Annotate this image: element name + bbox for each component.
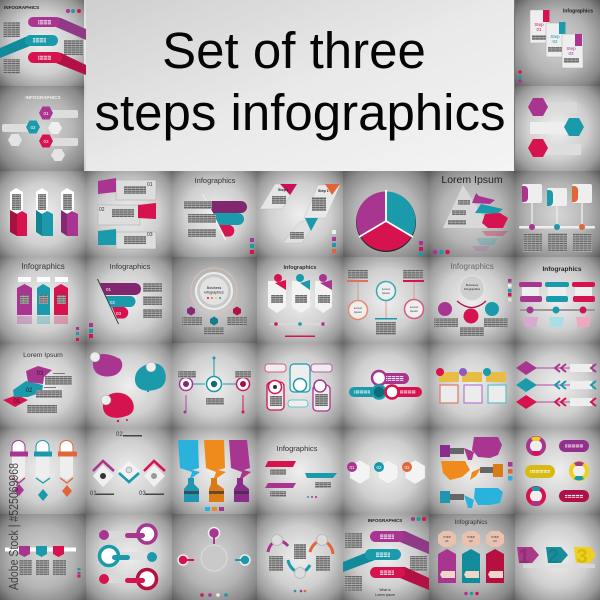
tile: diamond chevrons: 02 <box>116 432 123 438</box>
tile: stacked staircase: 01 <box>14 399 21 405</box>
tile: business infographics cluster: Infographics <box>464 287 481 291</box>
tile: step cards top-right: 02 <box>552 39 558 44</box>
tile: stacked staircase <box>3 352 72 413</box>
tile: step cards top-right: Step <box>534 22 544 27</box>
tile: peach hexes with tags: 03 <box>493 539 497 543</box>
tile: step cards top-right: Step <box>550 34 560 39</box>
tile: ribbon infographic bottom <box>343 517 429 597</box>
tile: peach hexes with tags: Infographics <box>455 520 487 526</box>
tile: flags with text panels <box>98 178 156 249</box>
tile: ribbon infographic bottom: What is <box>379 588 391 592</box>
watermark: stock reference: Adobe Stock | #525069968 <box>7 463 21 590</box>
tile: stacked staircase: Lorem Ipsum <box>23 352 63 359</box>
tile: business infographics cluster: Business <box>466 283 479 287</box>
tile: timeline with banners: Infographics <box>542 266 582 273</box>
tile: step cards top-right: Step <box>566 46 576 51</box>
tile: business infographics circle: Business <box>207 286 221 290</box>
tile: white hexagons <box>347 460 425 484</box>
tile: white hexagons: 03 <box>404 465 410 470</box>
tile: slanted step cards <box>260 184 340 253</box>
tile: triangle pyramid <box>433 174 508 254</box>
tile: slanted step cards: Step 1 <box>278 188 289 192</box>
tile: funnel with right text: 02 <box>110 300 116 305</box>
tile: yellow header frames <box>436 368 506 403</box>
tile: 3D numbered arrows <box>517 546 596 568</box>
tile: peach hexes with tags: 02 <box>469 539 473 543</box>
tile: pie chart <box>356 190 423 256</box>
tile: peach hexes with tags: 01 <box>445 539 449 543</box>
tile: diamond chevrons <box>90 432 165 497</box>
tile: hexagon steps: 02 <box>30 125 36 130</box>
tile: triangle pyramid: Lorem Ipsum <box>441 174 503 186</box>
title panel: Set of three <box>162 22 426 79</box>
tile: 3D numbered arrows: 3 <box>576 546 588 568</box>
tile: diamonds and chevrons <box>516 361 596 409</box>
tile: hexagon steps: INFOGRAPHICS <box>25 95 61 100</box>
tile: rounded frame nodes <box>265 364 332 411</box>
tile: paint bottles <box>178 440 251 511</box>
tile: arch tags <box>10 441 77 501</box>
tile: ringed lorem ipsum nodes: Ipsum <box>382 291 391 295</box>
tile: business infographics cluster <box>434 262 512 336</box>
tile: business infographics cluster: Infographics <box>450 262 494 271</box>
tile: stacked staircase: 03 <box>37 371 44 377</box>
tile: overlapping pills <box>349 371 422 398</box>
tile: hexagon steps: 03 <box>43 139 49 144</box>
tile: ringed lorem ipsum nodes: Lorem <box>354 306 363 310</box>
tile: step cards top-right: 03 <box>568 51 574 56</box>
tile: peach hexes with tags: STEP <box>443 535 451 539</box>
tile: pinned step tags: Infographics <box>283 265 317 271</box>
tile: white hexagons: 01 <box>349 465 355 470</box>
tile: funnel with right text: 01 <box>106 287 112 292</box>
tile: funnel with right text: 03 <box>116 311 122 316</box>
title panel <box>84 0 514 171</box>
tile: funnel with right text: Infographics <box>110 262 151 271</box>
tile: timeline with cards <box>519 184 595 252</box>
tile: step cards top-right: Infographics <box>563 8 593 14</box>
tile: timeline with banners <box>519 266 595 327</box>
tile: three pastel tags <box>17 262 79 341</box>
tile: ringed lorem ipsum nodes: Lorem <box>410 305 419 309</box>
tile: central circle with pins <box>178 528 250 597</box>
tile: 3D numbered arrows: 1 <box>518 546 530 568</box>
tile: slanted banners <box>265 444 337 498</box>
tile: paint blobs <box>90 352 166 422</box>
tile: ringed lorem ipsum nodes: Lorem <box>382 287 391 291</box>
tile: business infographics circle: infographics <box>204 290 224 294</box>
tile: three pastel tags: Infographics <box>21 262 65 271</box>
tile: ringed lorem ipsum nodes <box>347 270 424 335</box>
tile: white hexagons: 02 <box>376 465 382 470</box>
tile: step cards top-right: 01 <box>536 27 542 32</box>
tile: step cards top-right <box>518 8 593 83</box>
tile: ringed lorem ipsum nodes: Ipsum <box>410 309 419 313</box>
tile: ringed lorem ipsum nodes: Ipsum <box>354 310 363 314</box>
tile: 3D numbered arrows: 2 <box>547 546 559 568</box>
tile: 3D boxes with white tags <box>10 188 78 236</box>
tile: slanted banners: Infographics <box>277 444 318 453</box>
tile: ribbon infographic top-left <box>0 5 86 75</box>
tile: connected rings <box>178 356 251 414</box>
tile: funnel with side labels <box>184 176 254 254</box>
tile: stacked staircase: 02 <box>26 388 33 394</box>
tile: flags with text panels: 03 <box>147 232 153 238</box>
tile: peach hexes with tags: STEP <box>467 535 475 539</box>
tile: flags with text panels: 02 <box>99 207 105 213</box>
tile: peach hexes with tags: STEP <box>491 535 499 539</box>
tile: diamond chevrons: 03 <box>139 491 146 497</box>
tile: big ring bars <box>99 525 157 588</box>
tile: hexagon steps <box>2 95 78 161</box>
tile: shield steps with watermark overlap <box>5 546 80 578</box>
tile: slanted step cards: Step 1 <box>318 189 329 193</box>
tile: hexagon steps: 01 <box>43 111 49 116</box>
tile: pinned step tags <box>268 265 332 337</box>
tile: business infographics circle <box>182 268 247 335</box>
tile: large hexagons right <box>528 98 584 157</box>
tile: rings and pills <box>525 437 589 505</box>
tile: cycle of arrows <box>268 534 333 592</box>
tile: ribbon infographic bottom: INFOGRAPHICS <box>368 518 402 523</box>
tile: brush splats <box>440 437 512 508</box>
tile: peach hexes with tags <box>438 520 504 595</box>
title panel: steps infographics <box>94 84 506 141</box>
tile: funnel with right text <box>89 262 162 338</box>
tile: funnel with side labels: Infographics <box>195 176 236 185</box>
tile: flags with text panels: 01 <box>147 182 153 188</box>
tile: ribbon infographic bottom: Lorem Ipsum <box>375 593 395 597</box>
tile: ribbon infographic top-left: INFOGRAPHICS <box>4 5 39 10</box>
tile: diamond chevrons: 01 <box>90 491 97 497</box>
